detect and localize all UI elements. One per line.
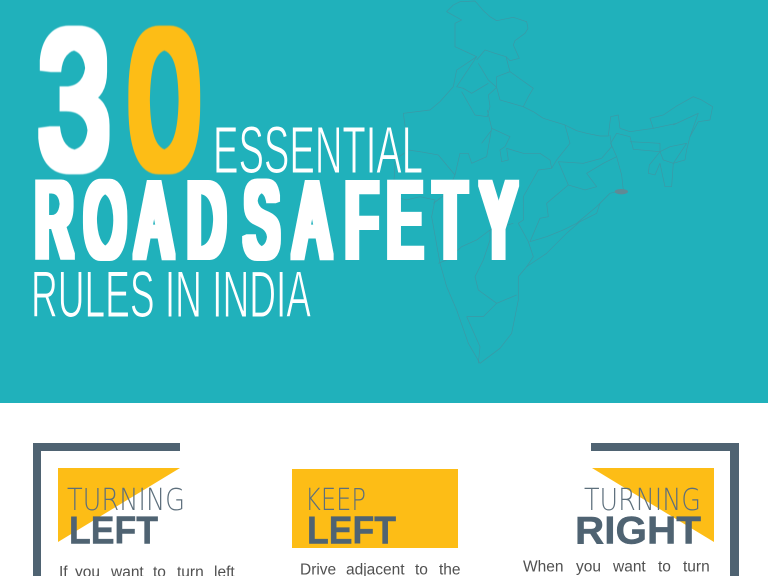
heading: essential: ESSENTIAL [213, 113, 423, 188]
heading: turning: TURNING [67, 483, 185, 518]
panel: keep left [292, 469, 461, 576]
panel: turning right [523, 443, 739, 576]
heading: keep: KEEP [305, 483, 366, 518]
corner frame [591, 443, 739, 576]
heading: turning: TURNING [584, 483, 701, 518]
title [31, 0, 516, 331]
panel: turning left [33, 443, 235, 576]
body text: you [576, 558, 601, 576]
map of India outline [393, 1, 713, 363]
heading: road: ROAD [36, 159, 225, 280]
heading: right: RIGHT [575, 510, 701, 553]
heading: rules in india: RULES IN INDIA [31, 257, 311, 331]
header panel background [0, 0, 768, 403]
yellow triangle [58, 468, 180, 542]
body text: turn [683, 558, 710, 576]
yellow rectangle [292, 469, 458, 548]
heading: left: LEFT [69, 510, 158, 553]
body text: to [658, 558, 671, 576]
heading: left: LEFT [307, 510, 396, 553]
corner frame [33, 443, 180, 576]
yellow triangle [592, 468, 714, 542]
body text: want [612, 558, 646, 576]
body text: When [523, 558, 564, 576]
heading: safety: SAFETY [244, 159, 516, 280]
